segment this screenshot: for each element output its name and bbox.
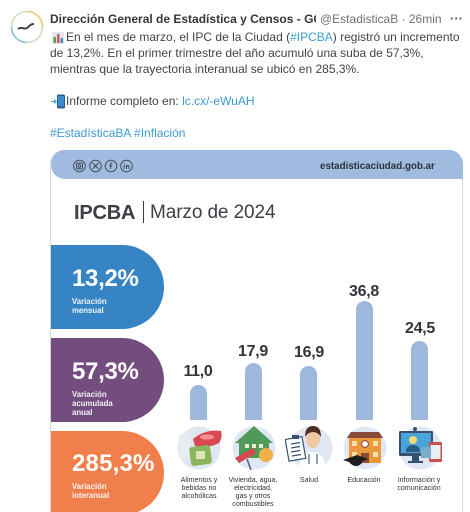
label: información — [397, 476, 441, 492]
label: salud: Salud — [300, 476, 318, 484]
avatar: organisation logo — [10, 10, 44, 44]
value: 285,3% — [72, 450, 155, 477]
label: vivienda: Vivienda, agua, — [229, 476, 277, 484]
tweet hashtags: #EstadísticaBA #Inflación — [50, 126, 185, 140]
bar: alimentos — [183, 363, 213, 420]
bar: salud — [294, 344, 324, 420]
tweet text: mientras que la trayectoria interanual se ubicó en 285,3%. — [50, 62, 360, 76]
label: mensual — [72, 306, 104, 315]
label: Variación — [72, 390, 107, 399]
label: alimentos: alcohólicas — [181, 492, 217, 500]
tweet text: En el mes de marzo, el IPC de la Ciudad (#IPCBA) registró un incremento — [66, 30, 460, 44]
icon: educación — [343, 426, 386, 470]
bar: vivienda — [238, 343, 268, 420]
title — [74, 201, 275, 224]
icon: bar chart emoji — [52, 32, 64, 44]
label: Variación — [72, 297, 107, 306]
label: interanual — [72, 491, 109, 500]
icon: alimentos — [178, 426, 222, 470]
tweet text — [50, 30, 460, 76]
label — [72, 390, 113, 417]
icon: información — [398, 426, 442, 470]
icon: vivienda — [232, 426, 276, 470]
bar: información — [405, 320, 435, 420]
card header band — [51, 150, 463, 179]
panel: variación acumulada anual — [51, 338, 164, 422]
label: Variación — [72, 482, 107, 491]
panel: variación mensual — [51, 245, 164, 329]
label: anual — [72, 408, 92, 417]
label: educación: Educación — [347, 476, 381, 484]
icon: salud — [285, 426, 332, 466]
title: IPCBA — [74, 202, 135, 224]
panel: variación interanual — [51, 431, 164, 512]
bar chart — [183, 283, 435, 420]
tweet text: de 13,2%. En el primer trimestre del año acumuló una suba de 57,3%, — [50, 46, 424, 60]
tweet header: ··· — [450, 11, 463, 26]
bar: salud: 16,9 — [294, 344, 324, 361]
label: información: Información y — [398, 476, 440, 484]
bar: vivienda: 17,9 — [238, 343, 268, 360]
bar: alimentos: 11,0 — [183, 363, 213, 380]
value: 13,2% — [72, 265, 139, 292]
label: vivienda: gas y otros — [236, 492, 270, 500]
bar: educación — [349, 283, 379, 420]
label: información: comunicación — [397, 484, 441, 492]
social icons — [73, 160, 133, 172]
bar: información: 24,5 — [405, 320, 435, 337]
bar: educación: 36,8 — [349, 283, 379, 300]
title: Marzo de 2024 — [150, 202, 275, 223]
label: alimentos: bebidas no — [182, 484, 216, 492]
label: alimentos — [180, 476, 218, 500]
label: acumulada — [72, 399, 113, 408]
label: vivienda — [228, 476, 277, 508]
value: 57,3% — [72, 358, 139, 385]
label — [72, 297, 107, 315]
tweet header: @EstadisticaB · 26min — [320, 12, 442, 26]
label: vivienda: combustibles — [232, 500, 274, 508]
category labels — [180, 476, 441, 508]
label: vivienda: electricidad, — [234, 484, 272, 492]
infographic card — [50, 150, 463, 512]
icon: phone with arrow — [51, 94, 65, 108]
tweet header — [50, 11, 463, 26]
website url: estadisticaciudad.gob.ar — [320, 161, 435, 172]
label — [72, 482, 109, 500]
label: alimentos: Alimentos y — [181, 476, 217, 484]
tweet link line: Informe completo en: lc.cx/-eWuAH — [66, 94, 255, 108]
